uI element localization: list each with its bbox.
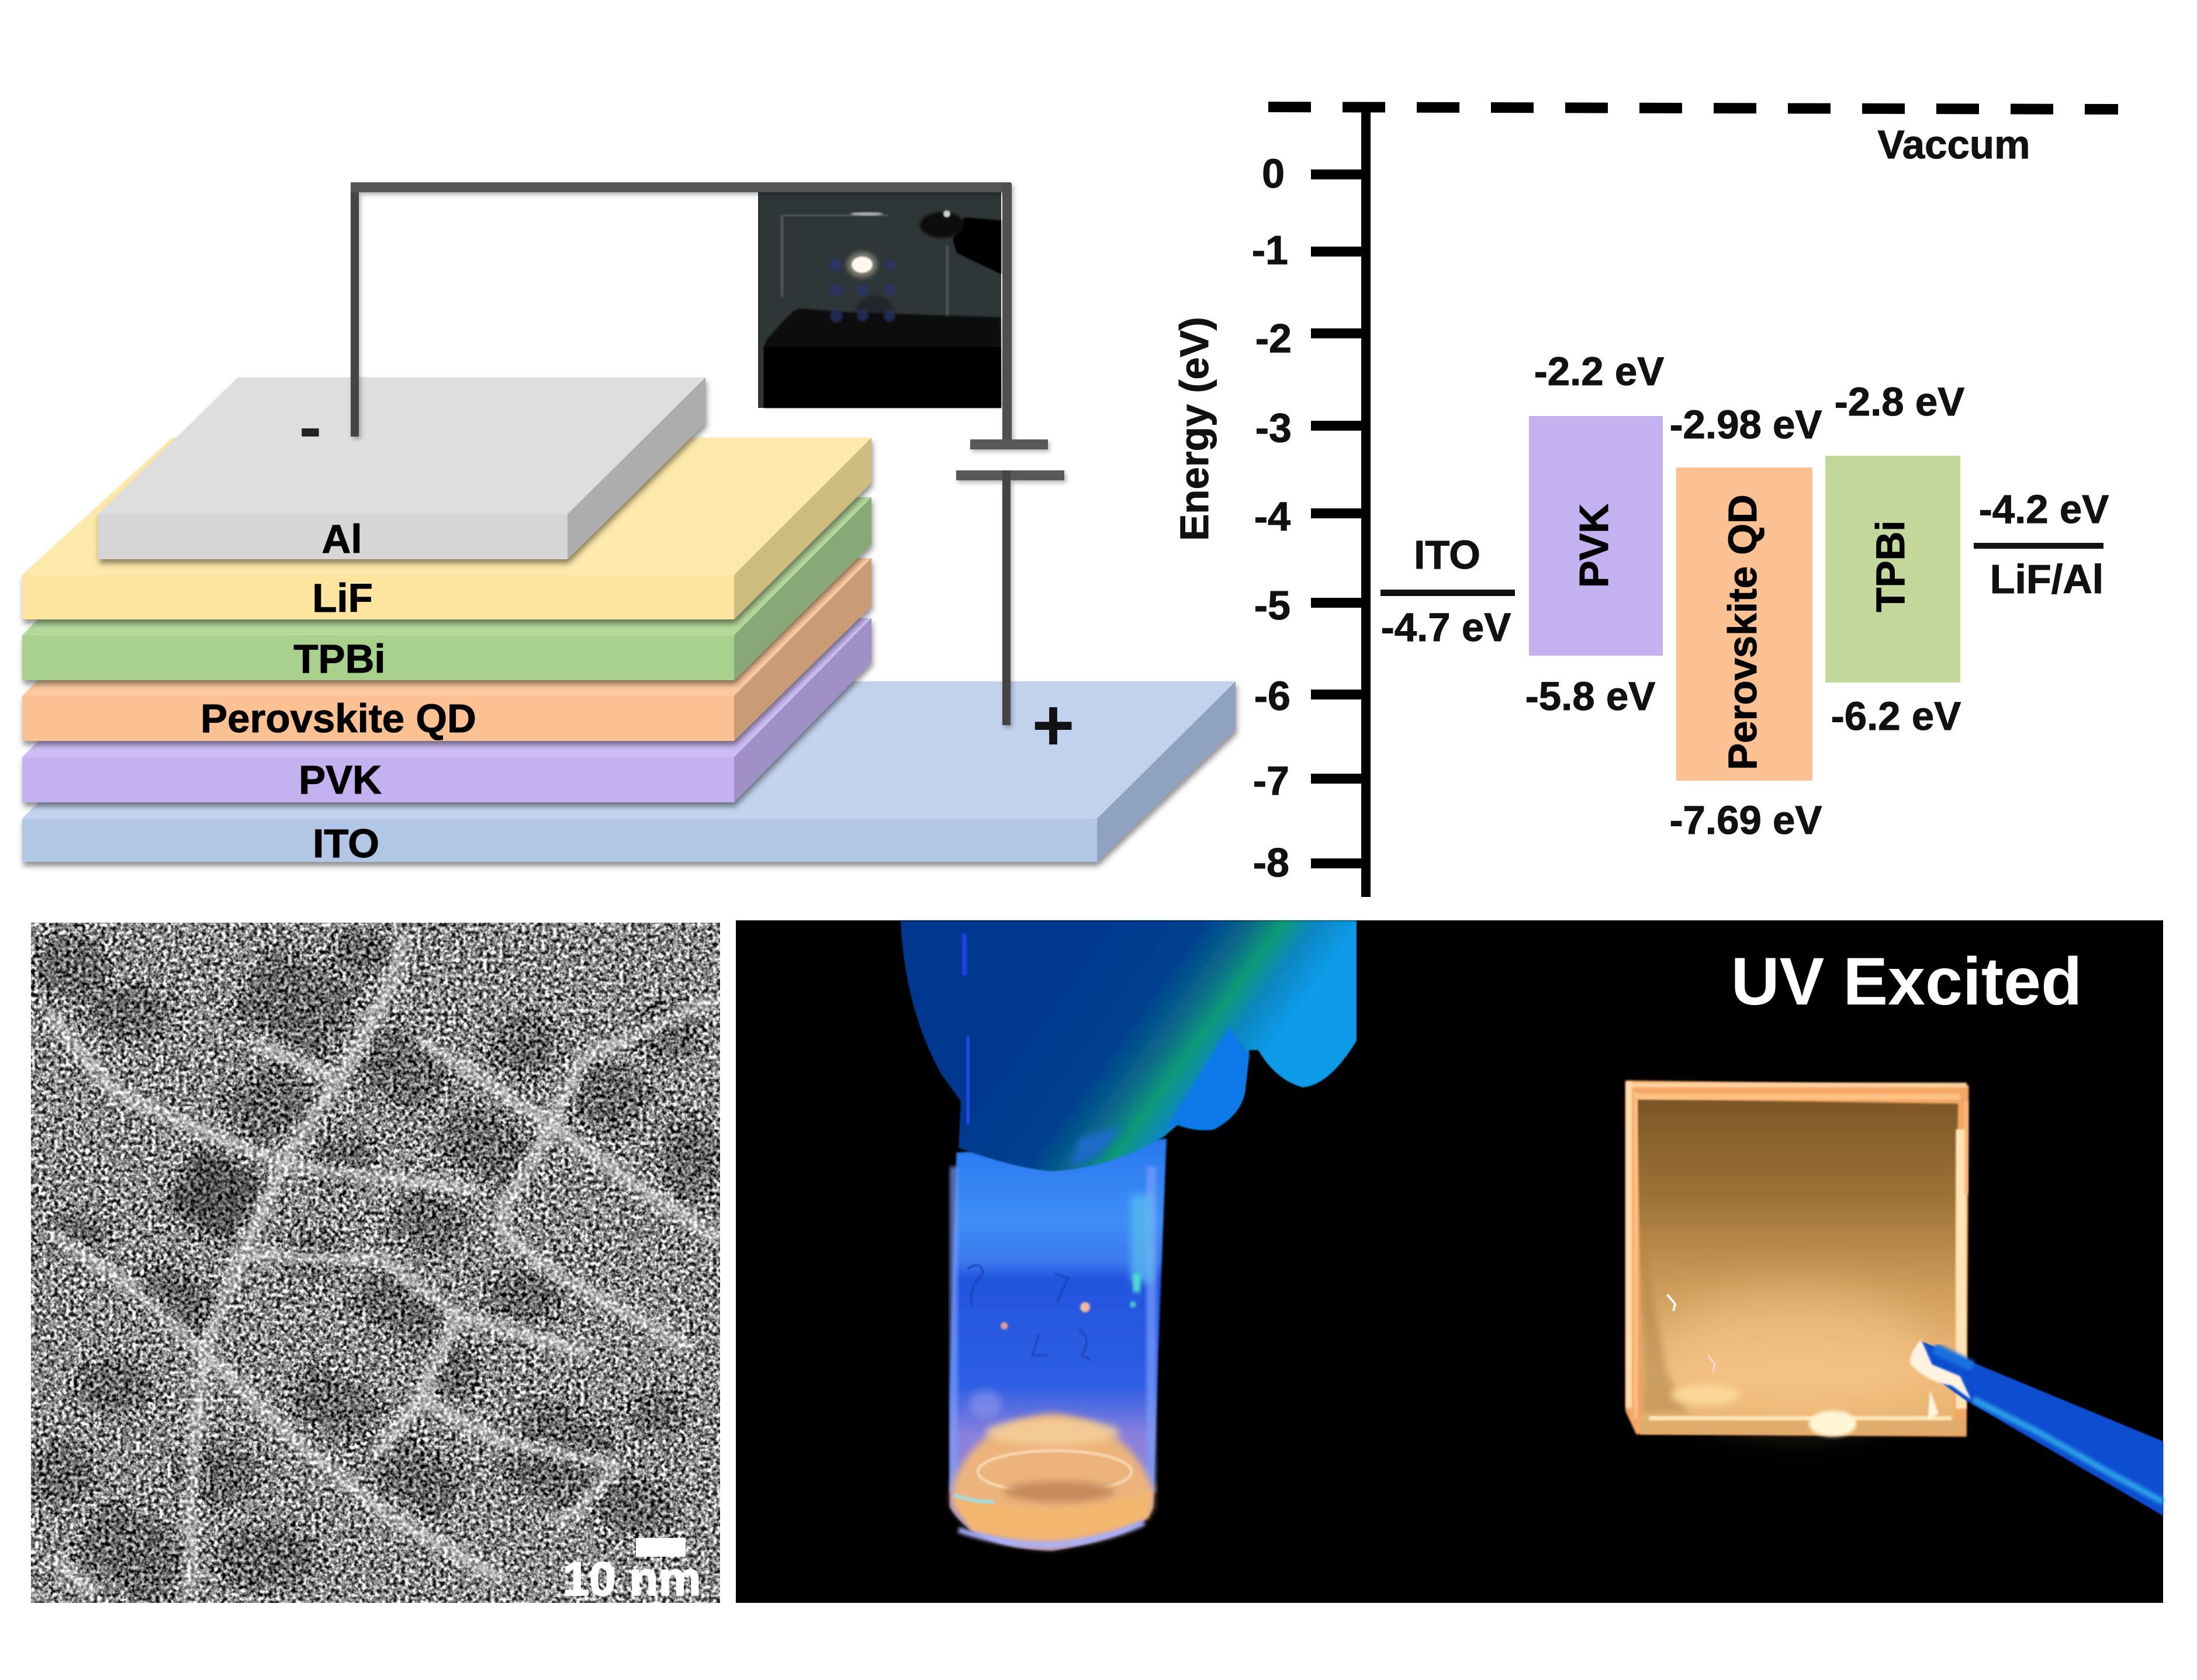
layer labels: PVK <box>299 757 382 802</box>
layer: ITO <box>22 681 1236 862</box>
level: ITO: ITO <box>1414 532 1480 577</box>
energy level diagram <box>1172 107 2118 897</box>
photo: glowing glass substrate <box>1625 1080 2163 1516</box>
band: TPBi: TPBi <box>1868 520 1913 612</box>
panel: TEM image <box>29 923 720 1611</box>
inset photo: glowing device <box>758 192 1001 408</box>
energy value labels: -6.2 eV <box>1831 694 1961 739</box>
grain texture <box>31 923 720 1603</box>
axis tick labels: -4 <box>1254 494 1290 539</box>
photo caption: UV Excited <box>1731 944 2082 1019</box>
vial body <box>950 1138 1167 1551</box>
axis tick labels: -1 <box>1252 227 1288 273</box>
energy value labels: -2.2 eV <box>1534 349 1664 394</box>
gloved hand <box>901 921 1357 1171</box>
layer: PVK <box>22 618 871 802</box>
axis tick labels: -5 <box>1254 583 1290 628</box>
band: Perovskite QD <box>1676 467 1812 781</box>
layer labels <box>200 517 476 866</box>
layer: Al <box>98 377 705 559</box>
layer labels: LiF <box>312 576 373 621</box>
band: PVK <box>1529 416 1663 656</box>
axis tick labels: -2 <box>1255 316 1292 361</box>
battery plates <box>956 439 1064 480</box>
level: ITO: -4.7 eV <box>1381 605 1511 650</box>
axis tick labels: -3 <box>1255 405 1292 451</box>
vial liquid <box>952 1414 1153 1547</box>
scale label: 10 nm <box>562 1553 701 1606</box>
axis tick labels: -7 <box>1253 758 1289 803</box>
axis tick labels: -8 <box>1253 840 1289 885</box>
layer labels: Al <box>321 517 362 562</box>
level: LiF/Al: -4.2 eV <box>1979 487 2109 532</box>
circuit wires and battery <box>351 182 1064 725</box>
level: ITO <box>1381 532 1515 650</box>
vacuum label: Vaccum <box>1878 122 2030 167</box>
photo: vial held by gloved hand <box>901 921 1357 1551</box>
energy value labels: -5.8 eV <box>1525 674 1655 719</box>
axis tick labels: -6 <box>1254 673 1290 719</box>
layer labels: ITO <box>313 821 379 866</box>
axis tick labels: 0 <box>1262 151 1285 196</box>
band: TPBi <box>1825 456 1960 683</box>
level: LiF/Al: LiF/Al <box>1990 556 2103 602</box>
layer: Perovskite QD <box>22 558 871 741</box>
device stack diagram <box>22 377 1236 866</box>
band: Perovskite QD: Perovskite QD <box>1720 494 1765 770</box>
energy axis <box>1311 108 1371 897</box>
level: LiF/Al <box>1974 487 2109 602</box>
band: PVK: PVK <box>1571 504 1617 588</box>
energy value labels: -2.98 eV <box>1670 402 1822 447</box>
vacuum level dashed line <box>1268 107 2118 109</box>
tweezers <box>1910 1340 2163 1516</box>
layer labels: Perovskite QD <box>200 696 476 741</box>
nanocrystal dark patches and light boundaries <box>29 929 720 1611</box>
positive terminal sign: + <box>1032 685 1074 766</box>
axis tick labels <box>1252 151 1292 885</box>
energy value labels: -7.69 eV <box>1670 798 1822 843</box>
layer: LiF <box>22 438 871 619</box>
energy value labels <box>1525 349 1964 843</box>
layer labels: TPBi <box>293 636 386 681</box>
panel: UV excited photos <box>736 920 2163 1603</box>
axis title: Energy (eV) <box>1172 317 1217 541</box>
scale bar <box>636 1538 686 1557</box>
energy value labels: -2.8 eV <box>1835 379 1964 424</box>
layer: TPBi <box>22 497 871 680</box>
negative terminal sign: - <box>299 389 321 465</box>
